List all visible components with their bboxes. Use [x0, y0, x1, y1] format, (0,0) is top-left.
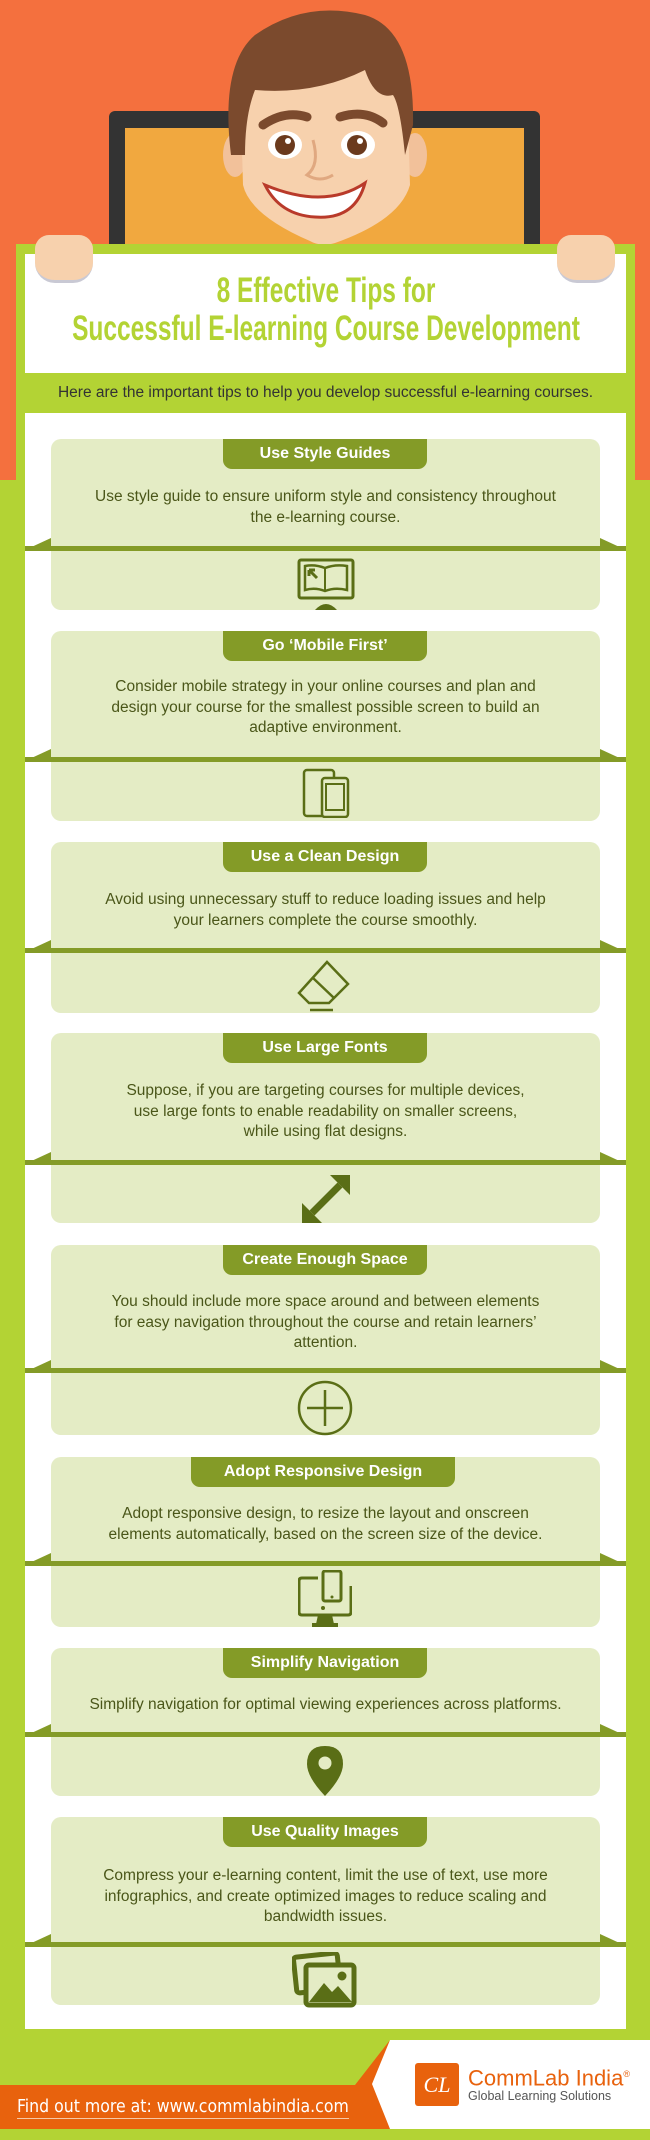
footer: orange banner [0, 2040, 390, 2129]
card 2: Go Mobile First: adaptive environment. [249, 719, 402, 736]
icon: eraser [297, 960, 350, 1012]
card 5: Create Enough Space [51, 1245, 600, 1435]
card 7: Simplify Navigation [51, 1648, 600, 1796]
character face [223, 10, 427, 244]
icon: book on monitor [298, 558, 354, 610]
logo mark [415, 2063, 459, 2106]
icon: images [292, 1952, 356, 2008]
card 4: Use Large Fonts: while using flat designs. [244, 1123, 407, 1140]
orange background [0, 0, 650, 480]
footer: logo panel [372, 2040, 650, 2129]
card 5: Create Enough Space: You should include more space around and between elements [112, 1293, 539, 1310]
card 3: Use a Clean Design [51, 842, 600, 1013]
card 5: Create Enough Space: for easy navigation throughout the course and retain learners’ [114, 1314, 537, 1330]
card 8: Use Quality Images: bandwidth issues. [264, 1908, 387, 1925]
card 6: Adopt Responsive Design: elements automatically, based on the screen size of the device. [109, 1526, 542, 1542]
icon: plus circle [298, 1380, 352, 1436]
card 6: Adopt Responsive Design: Adopt responsive design, to resize the layout and onscreen [122, 1505, 529, 1522]
title: Successful E-learning Course Development [72, 309, 579, 348]
icon: mobile devices [302, 768, 350, 818]
icon: location pin [307, 1746, 343, 1796]
card 8: Use Quality Images: infographics, and create optimized images to reduce scaling and [104, 1888, 546, 1904]
card 4: Use Large Fonts: use large fonts to enable readability on smaller screens, [134, 1102, 517, 1120]
card 5: Create Enough Space: Create Enough Space [242, 1251, 408, 1268]
icon: monitor and phone [298, 1570, 352, 1627]
card 1: Use Style Guides [51, 439, 600, 610]
footer: logo panel: Global Learning Solutions [468, 2089, 611, 2103]
card 4: Use Large Fonts: Use Large Fonts [262, 1039, 388, 1056]
card 6: Adopt Responsive Design: Adopt Responsive Design [224, 1463, 422, 1480]
card 1: Use Style Guides: Use style guide to ensure uniform style and consistency throughout [95, 488, 556, 505]
card 1: Use Style Guides: Use Style Guides [260, 445, 390, 462]
card 4: Use Large Fonts: Suppose, if you are targeting courses for multiple devices, [126, 1082, 525, 1099]
card 7: Simplify Navigation: Simplify navigation for optimal viewing experiences across platforms. [89, 1696, 562, 1713]
card 3: Use a Clean Design: your learners complete the course smoothly. [174, 912, 477, 928]
card 8: Use Quality Images: Use Quality Images [251, 1823, 399, 1840]
card 8: Use Quality Images: Compress your e-learning content, limit the use of text, use more [103, 1867, 548, 1884]
card 8: Use Quality Images [51, 1817, 600, 2005]
title: 8 Effective Tips for [216, 271, 435, 310]
card 1: Use Style Guides: the e-learning course. [251, 508, 400, 526]
icon: resize arrows [302, 1175, 350, 1223]
card 2: Go Mobile First: Go ‘Mobile First’ [262, 637, 388, 654]
white content panel [25, 413, 626, 2029]
white title panel [25, 254, 626, 373]
logo text: CommLab India® [468, 2065, 630, 2090]
card 2: Go Mobile First: design your course for the smallest possible screen to build an [111, 698, 540, 716]
title [72, 271, 580, 348]
logo mark: CL [424, 2072, 450, 2097]
card 7: Simplify Navigation: Simplify Navigation [251, 1654, 399, 1671]
card 5: Create Enough Space: attention. [294, 1334, 357, 1351]
card 3: Use a Clean Design: Use a Clean Design [251, 848, 399, 865]
footer link text: Find out more at: www.commlabindia.com [17, 2097, 349, 2117]
subtitle: Here are the important tips to help you develop successful e-learning courses. [58, 384, 593, 401]
green frame top panel [16, 244, 635, 2037]
card 6: Adopt Responsive Design [51, 1457, 600, 1627]
card 3: Use a Clean Design: Avoid using unnecessary stuff to reduce loading issues and help [105, 891, 546, 908]
monitor [109, 111, 540, 261]
card 4: Use Large Fonts [51, 1033, 600, 1223]
card 2: Go Mobile First [51, 631, 600, 821]
hands [35, 235, 615, 283]
card 2: Go Mobile First: Consider mobile strategy in your online courses and plan and [115, 678, 536, 695]
